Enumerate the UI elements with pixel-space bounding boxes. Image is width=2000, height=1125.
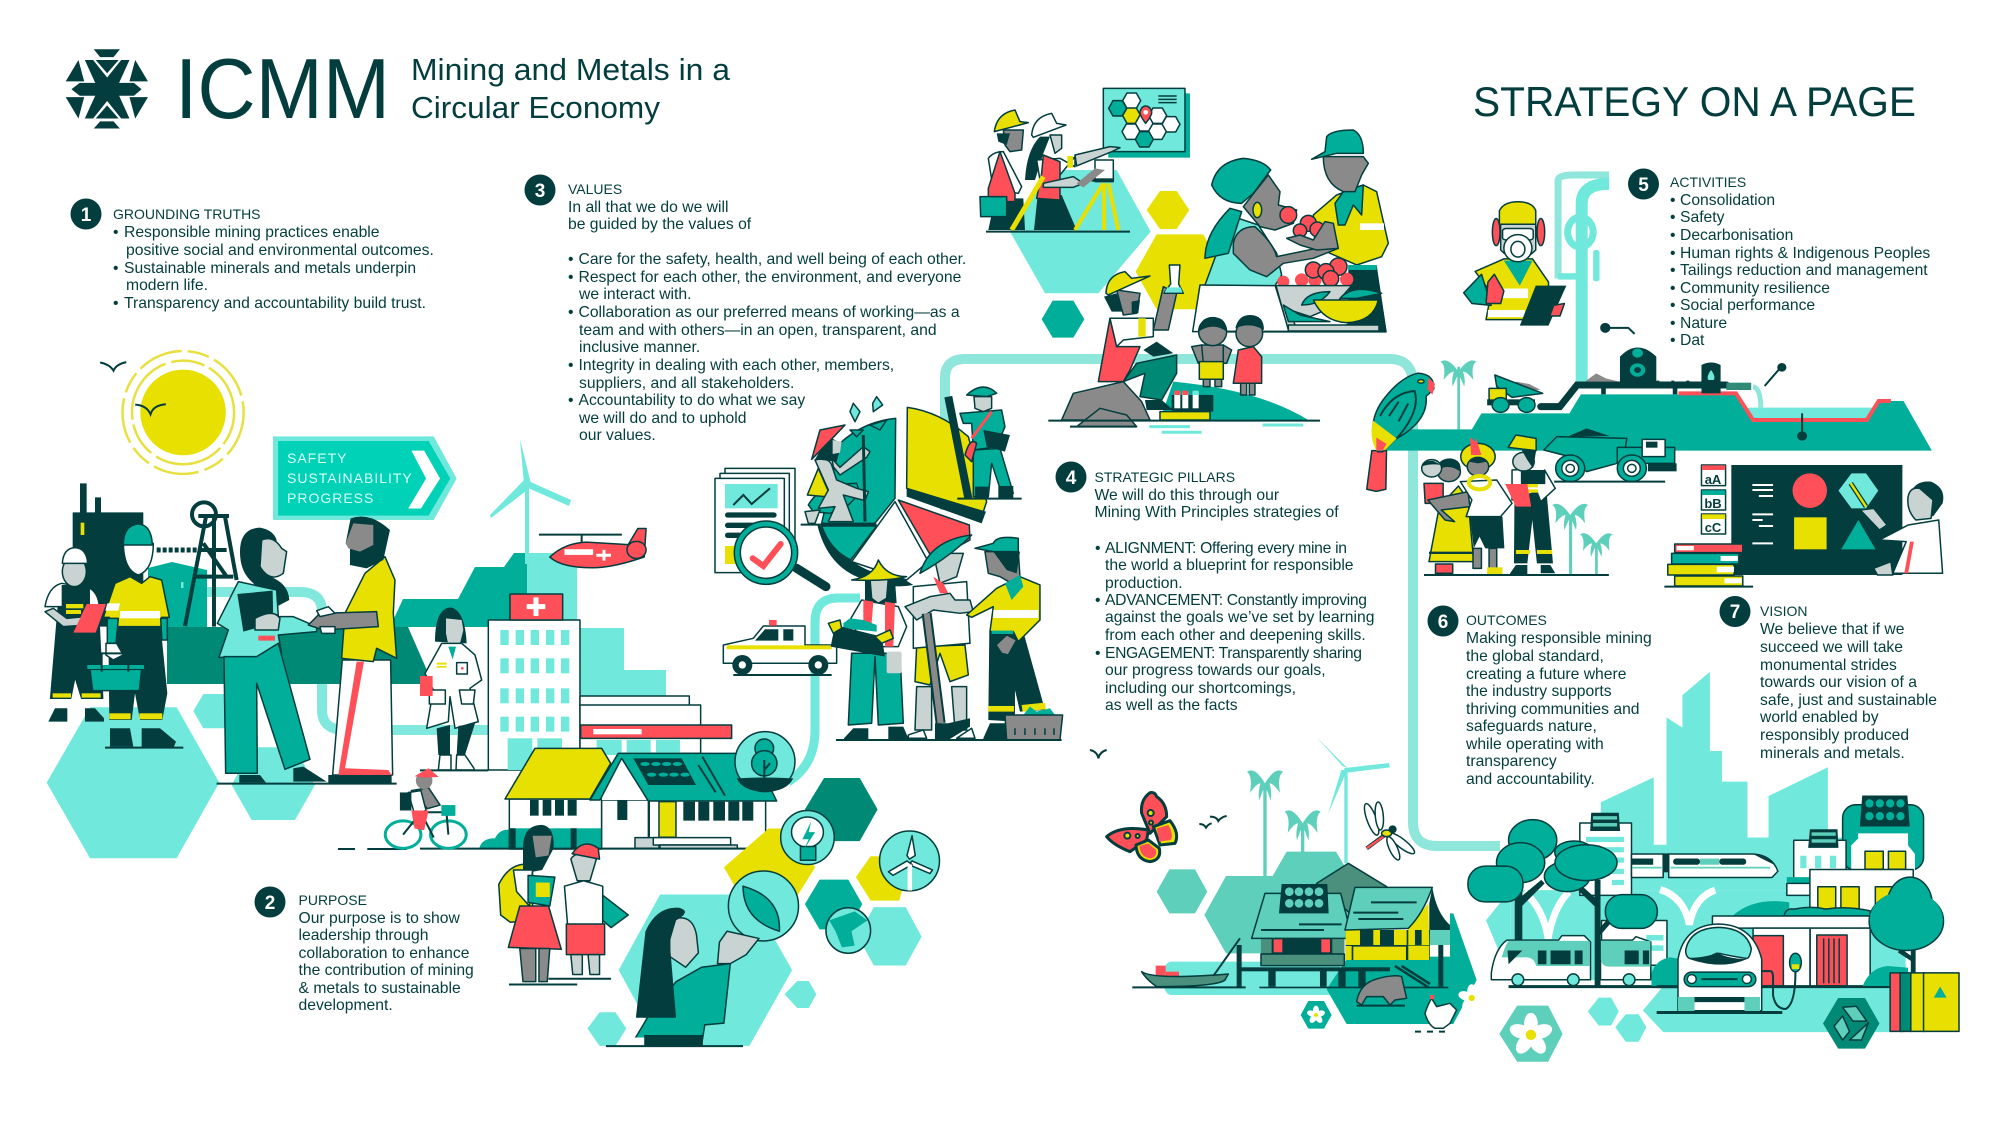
section 3: values	[524, 174, 966, 444]
section 7: vision: 7	[1730, 602, 1740, 623]
section 3: values: 3	[535, 181, 545, 202]
person: doctor	[420, 607, 488, 770]
icon: tripod	[986, 160, 1130, 232]
letter card text	[1704, 472, 1722, 535]
plant machinery	[1541, 348, 1786, 407]
section 2: purpose: the contribution of mining	[298, 962, 474, 979]
palm trees	[1247, 770, 1321, 877]
hexagon backdrop	[1157, 852, 1477, 1024]
section 2: purpose: leadership through	[298, 927, 428, 944]
sample kit	[1048, 391, 1320, 432]
section 5: activities: ACTIVITIES	[1670, 174, 1746, 190]
section 5: activities: 5	[1638, 175, 1649, 196]
section 6: outcomes: and accountability.	[1466, 771, 1595, 788]
person: surveyor woman	[1012, 113, 1120, 230]
tailings pool	[1679, 387, 1891, 441]
icon: light bulb	[781, 810, 834, 865]
section 2: purpose: Our purpose is to show	[298, 910, 460, 927]
middle eco building	[1732, 870, 1913, 916]
section 3: values: we will do and to uphold	[578, 410, 746, 427]
section 5: activities: Decarbonisation	[1680, 227, 1793, 244]
section 6: outcomes: 6	[1438, 612, 1448, 633]
icon: dragonfly	[1362, 802, 1417, 861]
signboard	[273, 436, 457, 520]
section 3: values: our values.	[579, 427, 656, 444]
section 2: purpose: PURPOSE	[298, 892, 367, 908]
signboard text: PROGRESS	[287, 490, 374, 506]
section 1: grounding truths: modern life.	[126, 277, 208, 294]
section 3: values: we interact with.	[578, 286, 691, 303]
person: surveyor with hat	[948, 387, 1022, 499]
section 5: activities	[1628, 168, 1930, 349]
section 5: activities: •	[1670, 227, 1676, 244]
bottom right backdrop: skyline	[1486, 672, 1906, 1032]
section 4: strategic pillars: production.	[1105, 575, 1183, 592]
letter cards	[1701, 465, 1726, 534]
section 5: activities: Consolidation	[1680, 192, 1775, 209]
stilt house left	[1252, 884, 1352, 966]
section 1: grounding truths: •	[113, 295, 118, 312]
section 4: strategic pillars: STRATEGIC PILLARS	[1094, 469, 1235, 485]
section 4: strategic pillars: •	[1095, 540, 1100, 557]
person: worker with basket	[87, 524, 176, 748]
section 6: outcomes	[1428, 606, 1652, 788]
tomatoes, bowl and hands	[1200, 215, 1387, 332]
person: man with tool	[905, 535, 975, 740]
solar roof house	[420, 753, 777, 849]
section 5: activities: Nature	[1680, 315, 1727, 332]
section 7: vision: succeed we will take	[1760, 639, 1903, 656]
section 3: values: Care for the safety, health, and well being of each other.	[578, 251, 966, 268]
section 4: strategic pillars: as well as the facts	[1105, 697, 1238, 714]
section 3: values: VALUES	[568, 181, 622, 197]
person: worker with mask and tablet	[1464, 202, 1566, 326]
letter card text: cC	[1705, 520, 1722, 535]
icon: document	[715, 468, 795, 573]
stilt house right	[1345, 887, 1450, 960]
section 7: vision: towards our vision of a	[1760, 674, 1917, 691]
icon: dump truck	[1487, 375, 1543, 412]
top scene: survey team, map and scientist	[980, 88, 1320, 432]
section 6: outcomes: transparency	[1466, 753, 1557, 770]
section 3: values: In all that we do we will	[568, 199, 728, 216]
section 3: values: •	[568, 304, 574, 321]
upper centre scene: pie chart and people	[715, 387, 1063, 740]
section 7: vision	[1720, 596, 1937, 762]
signboard text: SUSTAINABILITY	[287, 470, 413, 486]
section 7: vision: VISION	[1760, 603, 1807, 619]
icon: haul truck	[1544, 428, 1677, 482]
icon: recycling hex	[1823, 998, 1879, 1049]
section 3: values: Integrity in dealing with each other, members,	[578, 357, 894, 374]
icon: pickup truck	[723, 620, 837, 675]
section 2: purpose: 2	[265, 893, 275, 914]
flower in teal hex	[1457, 984, 1486, 1012]
section 3: values: •	[568, 392, 574, 409]
wind turbine	[1316, 737, 1390, 863]
icon: buses	[1491, 936, 1679, 987]
section 4: strategic pillars	[1056, 462, 1374, 714]
icon: shuttle	[1657, 924, 1782, 1012]
activity pipes and valves	[1558, 175, 1635, 387]
section 5: activities: Dat	[1680, 332, 1705, 349]
subtitle: Mining and Metals in a	[411, 52, 731, 87]
pie chart	[817, 407, 987, 586]
icon: earth circle	[826, 908, 871, 953]
background: sun	[100, 351, 244, 474]
section 3: values: Respect for each other, the environment, and everyone	[578, 269, 962, 286]
person: worker with clipboard and helmet	[1424, 435, 1609, 575]
section 7: vision: responsibly produced	[1760, 727, 1909, 744]
letter card text: bB	[1704, 496, 1722, 511]
title: STRATEGY ON A PAGE	[1473, 78, 1916, 125]
section 6: outcomes: OUTCOMES	[1466, 612, 1547, 628]
section 7: vision: minerals and metals.	[1760, 745, 1905, 762]
overpass arches	[1524, 890, 1715, 938]
section 5: activities: •	[1670, 297, 1676, 314]
section 2: purpose: & metals to sustainable	[298, 980, 461, 997]
ground lines left	[105, 748, 407, 849]
icon: butterfly	[1107, 792, 1177, 862]
section 3: values: be guided by the values of	[568, 216, 752, 233]
dashed road	[338, 848, 355, 850]
icon: charger	[1762, 953, 1801, 1009]
section 4: strategic pillars: ENGAGEMENT: Transparently sharing	[1105, 645, 1362, 662]
section 7: vision: world enabled by	[1759, 709, 1879, 726]
birds	[1090, 750, 1227, 828]
subtitle: Circular Economy	[411, 90, 661, 125]
seller with turban	[1193, 158, 1338, 332]
section 4: strategic pillars: •	[1095, 645, 1100, 662]
section 1: grounding truths: •	[113, 260, 118, 277]
family: mother and child	[1421, 458, 1474, 573]
hills and buildings backdrop	[148, 553, 666, 696]
section 3: values: •	[568, 269, 574, 286]
section 6: outcomes: the industry supports	[1466, 683, 1612, 700]
icon: parrot	[1367, 373, 1435, 491]
city scene	[1457, 795, 1959, 1062]
section 4: strategic pillars: our progress towards our goals,	[1105, 662, 1326, 679]
village scene	[1090, 737, 1477, 1032]
section 3: values: team and with others—in an open, transparent, and	[579, 322, 937, 339]
section 5: activities: •	[1670, 209, 1676, 226]
cyclist	[385, 768, 466, 848]
section 4: strategic pillars: We will do this through our	[1094, 487, 1279, 504]
palm trees	[1552, 504, 1612, 574]
section 4: strategic pillars: 4	[1066, 468, 1077, 489]
icon: produce crate	[836, 707, 1063, 740]
left wing eco building	[1787, 829, 1846, 895]
lower eco building	[1657, 916, 1891, 987]
small mint hexes	[1588, 998, 1646, 1042]
section 1: grounding truths	[70, 198, 434, 312]
section 3: values: suppliers, and all stakeholders.	[579, 375, 794, 392]
right tree	[1863, 877, 1944, 986]
section 3: values: •	[568, 357, 574, 374]
section 5: activities: Tailings reduction and management	[1680, 262, 1928, 279]
trees	[1468, 820, 1657, 987]
icon: wind turbine left	[490, 439, 571, 564]
section 5: activities: •	[1670, 315, 1676, 332]
deck and stilts	[1237, 945, 1448, 988]
section 2: purpose: development.	[298, 997, 393, 1014]
section 1: grounding truths: 1	[81, 205, 92, 226]
subtitle	[411, 52, 731, 125]
palm tree	[1440, 360, 1476, 430]
icon: chicken	[1415, 995, 1457, 1032]
section 4: strategic pillars: ADVANCEMENT: Constantly improving	[1105, 592, 1367, 609]
icon: turbine circle	[880, 831, 939, 891]
small white building	[1602, 921, 1667, 965]
section 4: strategic pillars: ALIGNMENT: Offering every mine in	[1105, 540, 1347, 557]
icon: boar	[1357, 976, 1407, 1006]
icon: helicopter	[539, 529, 646, 568]
background hexagons left	[47, 694, 315, 858]
section 1: grounding truths: Responsible mining practices enable	[124, 224, 380, 241]
person: surveyor man	[980, 110, 1028, 230]
section 1: grounding truths: Sustainable minerals and metals underpin	[124, 260, 416, 277]
yellow roof house	[479, 748, 611, 849]
icon: train	[1631, 853, 1778, 877]
section 7: vision: We believe that if we	[1760, 621, 1905, 638]
person: worker with yellow vest	[967, 537, 1046, 740]
icon: map card	[1103, 88, 1190, 158]
icon: leaf circle	[728, 871, 799, 941]
section 1: grounding truths: positive social and environmental outcomes.	[126, 242, 434, 259]
section 5: activities: Safety	[1680, 209, 1725, 226]
children on hill	[1192, 315, 1264, 395]
section 5: activities: Community resilience	[1680, 280, 1830, 297]
lower left scene: hexes, icons, children	[499, 778, 939, 1046]
section 5: activities: Human rights & Indigenous Peoples	[1680, 245, 1930, 262]
person: worker with clipboard	[45, 548, 106, 722]
section 7: vision: monumental strides	[1760, 657, 1897, 674]
section 6: outcomes: safeguards nature,	[1466, 718, 1597, 735]
person: teacher	[1851, 481, 1943, 575]
icon: recycling bin	[1890, 973, 1959, 1031]
person: schoolboy	[549, 844, 628, 979]
signboard text: SAFETY	[287, 450, 347, 466]
section 3: values: Accountability to do what we say	[578, 392, 805, 409]
section 6: outcomes: the global standard,	[1466, 648, 1604, 665]
section 6: outcomes: thriving communities and	[1466, 701, 1640, 718]
icon: flower hex large	[1499, 1006, 1563, 1062]
section 7: vision: safe, just and sustainable	[1760, 692, 1937, 709]
person: child right	[1233, 315, 1264, 395]
section 3: values: inclusive manner.	[579, 339, 700, 356]
section 2: purpose: collaboration to enhance	[298, 945, 470, 962]
family: man with headdress	[1460, 437, 1512, 574]
teaching board	[1731, 465, 1902, 575]
market stall: woman and vendor	[1193, 130, 1388, 332]
icon: flower hex small	[1301, 1001, 1332, 1029]
annex building	[580, 696, 732, 755]
upper eco building	[1843, 795, 1924, 870]
section 1: grounding truths: •	[113, 224, 118, 241]
section 5: activities: •	[1670, 280, 1676, 297]
factory and headframe	[73, 483, 237, 627]
section 1: grounding truths: GROUNDING TRUTHS	[113, 206, 261, 222]
background hexes lower	[587, 778, 922, 1046]
person: girl with globe	[606, 908, 759, 1046]
section 5: activities: •	[1670, 262, 1676, 279]
icon: magnifying glass	[734, 521, 826, 587]
person: woman planting	[801, 397, 887, 525]
section 3: values: •	[568, 251, 574, 268]
section 4: strategic pillars: Mining With Principles strategies of	[1094, 504, 1339, 521]
person: schoolgirl	[499, 825, 577, 985]
person: woman in suit	[217, 528, 327, 783]
section 2: purpose	[254, 886, 474, 1014]
person: child left	[1192, 317, 1232, 387]
office tower	[1580, 813, 1631, 895]
background: connecting pipes	[207, 359, 1500, 846]
signboard text	[287, 450, 413, 506]
bush	[1651, 957, 1681, 986]
section 3: values: Collaboration as our preferred means of working—as a	[578, 304, 960, 321]
section 6: outcomes: while operating with	[1465, 736, 1604, 753]
vendor in cap	[1312, 130, 1388, 332]
section 4: strategic pillars: from each other and deepening skills.	[1105, 627, 1366, 644]
section 4: strategic pillars: •	[1095, 592, 1100, 609]
letter card text: aA	[1705, 472, 1722, 487]
section 4: strategic pillars: including our shortcomings,	[1105, 680, 1296, 697]
section 5: activities: Social performance	[1680, 297, 1815, 314]
mine site land and machinery	[1380, 348, 1943, 587]
section 4: strategic pillars: the world a blueprint for responsible	[1105, 557, 1354, 574]
background hexagons	[1010, 170, 1223, 338]
logo wordmark ICMM: ICMM	[175, 42, 390, 137]
hospital	[488, 594, 580, 770]
section 4: strategic pillars: against the goals we’ve set by learning	[1105, 609, 1374, 626]
background roof	[1317, 863, 1387, 913]
person: man in yellow shirt	[308, 517, 397, 783]
section 5: activities: •	[1670, 245, 1676, 262]
person: woman with crate	[828, 560, 908, 740]
section 5: activities: •	[1670, 192, 1676, 209]
icon: ICMM logo	[66, 49, 148, 129]
icon: tree circle	[735, 732, 795, 792]
section 1: grounding truths: Transparency and accountability build trust.	[124, 295, 426, 312]
books	[1664, 544, 1753, 587]
land	[1380, 394, 1932, 451]
person: scientist on rock	[1062, 265, 1308, 427]
section 6: outcomes: Making responsible mining	[1466, 630, 1652, 647]
icon: boat	[1132, 938, 1246, 987]
section 5: activities: •	[1670, 332, 1676, 349]
section 6: outcomes: creating a future where	[1466, 666, 1627, 683]
